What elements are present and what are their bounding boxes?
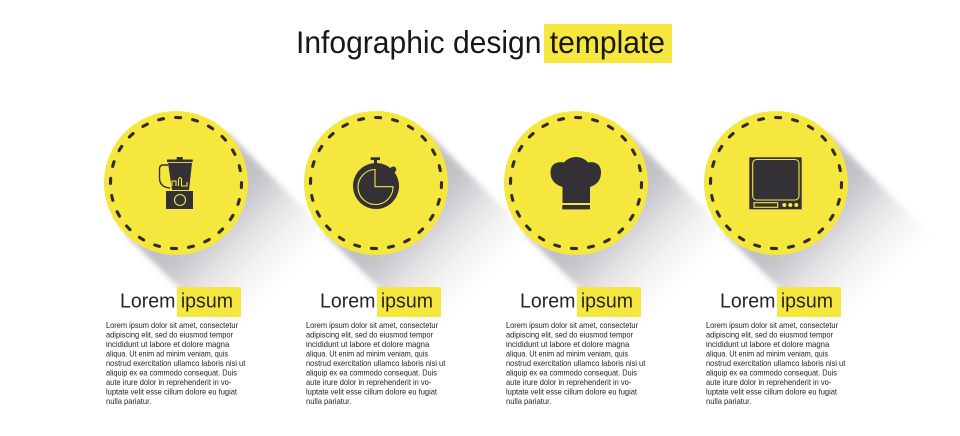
- dashed ring: [110, 118, 242, 248]
- text block: col 4: Lorem ipsum dolor sit amet, consectetur: [706, 321, 838, 330]
- text block: col 4: adipiscing elit, sed do eiusmod tempor: [706, 330, 833, 340]
- long shadow: [725, 132, 957, 364]
- text block: col 4: nulla pariatur.: [706, 397, 751, 406]
- dashed ring: [510, 118, 642, 248]
- text block: col 3: [506, 321, 646, 406]
- text block: col 1: aliqua. Ut enim ad minim veniam, quis: [106, 350, 228, 358]
- text block: col 2: [306, 321, 446, 406]
- panel: chef hat: [504, 111, 757, 364]
- text block: col 3: luptate velit esse cillum dolore eu fugiat: [506, 388, 638, 396]
- text block: col 1: nulla pariatur.: [106, 397, 151, 406]
- icon: oven: [749, 157, 802, 209]
- text block: col 2: adipiscing elit, sed do eiusmod tempor: [306, 330, 433, 340]
- text block: col 4: aliqua. Ut enim ad minim veniam, quis: [706, 350, 828, 358]
- text block: col 3: aliquip ex ea commodo consequat. Duis: [506, 368, 637, 378]
- text block: col 1: adipiscing elit, sed do eiusmod tempor: [106, 330, 233, 340]
- panel: blender: [104, 111, 357, 364]
- text block: col 1: Lorem ipsum dolor sit amet, consectetur: [106, 321, 238, 330]
- heading: col 2: Lorem ipsum: [320, 290, 433, 312]
- text block: col 1: luptate velit esse cillum dolore eu fugiat: [106, 388, 238, 396]
- dashed ring: [710, 118, 842, 248]
- text block: col 3: nulla pariatur.: [506, 397, 551, 406]
- text block: col 4: incididunt ut labore et dolore magna: [706, 340, 830, 349]
- text block: col 1: nostrud exercitation ullamco laboris nisi ut: [106, 359, 246, 368]
- heading: col 3: Lorem ipsum: [520, 290, 633, 312]
- dashed ring: [310, 118, 442, 248]
- text block: col 4: aute irure dolor in reprehenderit in vo-: [706, 378, 832, 387]
- text block: col 2: Lorem ipsum dolor sit amet, consectetur: [306, 321, 438, 330]
- heading: col 1: Lorem ipsum: [120, 290, 233, 312]
- text block: col 2: aute irure dolor in reprehenderit in vo-: [306, 378, 432, 387]
- yellow circle: [704, 111, 848, 255]
- text block: col 4: [706, 321, 846, 406]
- text block: col 2: luptate velit esse cillum dolore eu fugiat: [306, 388, 438, 396]
- text block: col 3: aliqua. Ut enim ad minim veniam, quis: [506, 350, 628, 358]
- long shadow: [525, 132, 757, 364]
- heading: col 4: Lorem ipsum: [720, 290, 833, 312]
- text block: col 4: nostrud exercitation ullamco laboris nisi ut: [706, 359, 846, 368]
- text block: col 2: aliquip ex ea commodo consequat. Duis: [306, 368, 437, 378]
- panel: oven: [704, 111, 957, 364]
- text block: col 2: incididunt ut labore et dolore magna: [306, 340, 430, 349]
- text block: col 3: incididunt ut labore et dolore magna: [506, 340, 630, 349]
- yellow circle: [304, 111, 448, 255]
- text block: col 3: nostrud exercitation ullamco laboris nisi ut: [506, 359, 646, 368]
- text block: col 2: nostrud exercitation ullamco laboris nisi ut: [306, 359, 446, 368]
- panel: stopwatch: [304, 111, 557, 364]
- yellow circle: [104, 111, 248, 255]
- long shadow: [325, 132, 557, 364]
- text block: col 3: aute irure dolor in reprehenderit in vo-: [506, 378, 632, 387]
- text block: col 1: incididunt ut labore et dolore magna: [106, 340, 230, 349]
- yellow circle: [504, 111, 648, 255]
- text block: col 3: adipiscing elit, sed do eiusmod tempor: [506, 330, 633, 340]
- text block: col 1: aute irure dolor in reprehenderit in vo-: [106, 378, 232, 387]
- icon: blender: [160, 157, 193, 209]
- long shadow: [125, 132, 357, 364]
- text block: col 1: aliquip ex ea commodo consequat. Duis: [106, 368, 237, 378]
- text block: col 4: aliquip ex ea commodo consequat. Duis: [706, 368, 837, 378]
- title: Infographic design template: [296, 24, 665, 60]
- text block: col 4: luptate velit esse cillum dolore eu fugiat: [706, 388, 838, 396]
- text block: col 2: aliqua. Ut enim ad minim veniam, quis: [306, 350, 428, 358]
- text block: col 1: [106, 321, 246, 406]
- text block: col 3: Lorem ipsum dolor sit amet, consectetur: [506, 321, 638, 330]
- text block: col 2: nulla pariatur.: [306, 397, 351, 406]
- icon: chef hat: [550, 157, 601, 209]
- icon: stopwatch: [353, 157, 399, 209]
